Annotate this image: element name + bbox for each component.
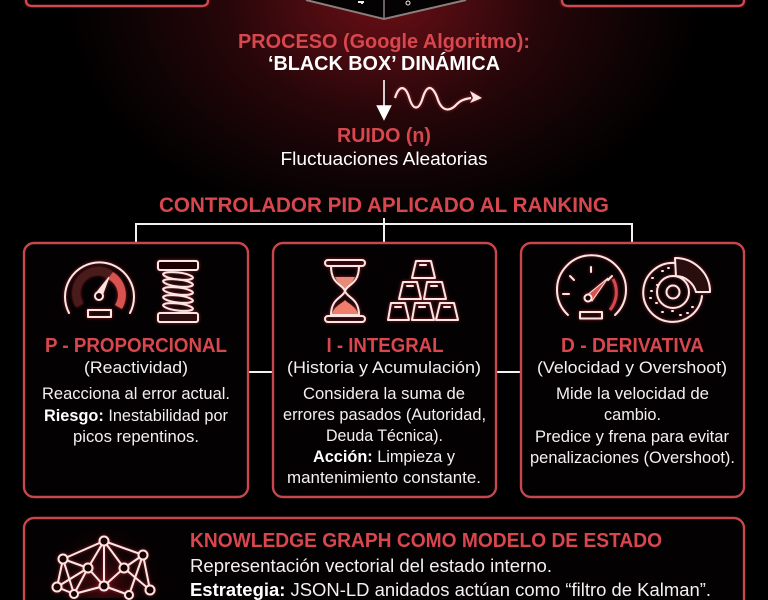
description: Mide la velocidad de — [556, 384, 709, 403]
description: Deuda Técnica). — [326, 426, 443, 445]
icon: spring — [158, 261, 198, 322]
heading: KNOWLEDGE GRAPH COMO MODELO DE ESTADO — [190, 529, 662, 552]
heading: P - PROPORCIONAL — [45, 334, 227, 357]
description: Acción: Limpieza y — [313, 447, 455, 466]
strategy: Estrategia: JSON-LD anidados actúan como “filtro de Kalman”. — [190, 580, 711, 600]
panel: top left box — [26, 0, 208, 6]
description: Riesgo: Inestabilidad por — [44, 406, 228, 425]
connectors — [136, 218, 632, 372]
heading: black box: ‘BLACK BOX’ DINÁMICA — [268, 52, 500, 75]
panel: derivative — [521, 243, 744, 497]
subheading: (Historia y Acumulación) — [287, 358, 481, 377]
text: noise description: Fluctuaciones Aleatorias — [280, 149, 488, 169]
icon: noise wave arrow — [395, 88, 482, 109]
panel: knowledge graph — [24, 518, 744, 600]
heading: noise: RUIDO (n) — [337, 124, 431, 147]
icon: knowledge graph network — [52, 536, 154, 599]
description: Considera la suma de — [303, 384, 465, 403]
heading: process: PROCESO (Google Algoritmo): — [238, 30, 530, 53]
icon: gold bars — [388, 261, 458, 320]
arrow: down to noise — [378, 80, 390, 119]
icon: speedometer — [557, 255, 626, 318]
description: mantenimiento constante. — [287, 468, 481, 487]
description — [42, 384, 230, 446]
subheading: (Velocidad y Overshoot) — [537, 358, 727, 377]
icon: black box cube — [306, 0, 466, 19]
description: picos repentinos. — [73, 427, 199, 446]
description: Predice y frena para evitar — [535, 427, 729, 446]
description — [283, 384, 486, 487]
subheading: (Reactividad) — [84, 358, 188, 377]
heading: pid controller: CONTROLADOR PID APLICADO AL RANKING — [159, 194, 609, 217]
panel: top right box — [562, 0, 744, 6]
panel: integral — [273, 243, 496, 497]
icon: hourglass — [325, 260, 365, 322]
heading: D - DERIVATIVA — [561, 334, 704, 357]
description: penalizaciones (Overshoot). — [530, 448, 735, 467]
description: Reacciona al error actual. — [42, 384, 230, 403]
description: cambio. — [604, 405, 661, 424]
panel: proportional — [24, 243, 248, 497]
icon: brake disc — [643, 258, 710, 322]
heading: I - INTEGRAL — [326, 334, 444, 357]
description: Representación vectorial del estado interno. — [190, 556, 552, 576]
description — [530, 384, 735, 467]
description: errores pasados (Autoridad, — [283, 405, 486, 424]
icon: gauge — [65, 262, 134, 317]
